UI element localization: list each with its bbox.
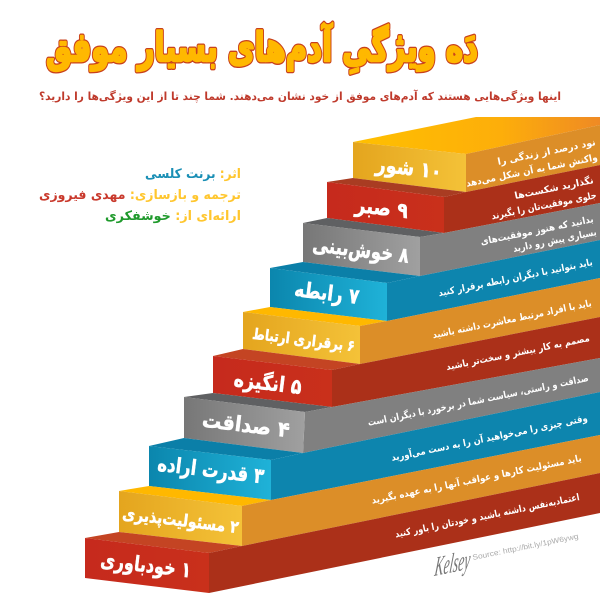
step 5: ۵ انگیزه: [233, 366, 303, 399]
step 10: ۱۰ شور: [374, 152, 443, 184]
credits: ترجمه و بازسازی: مهدی فیروزی: [39, 188, 241, 203]
credits: ارائه‌ای از: خوشفکری: [105, 209, 241, 224]
step 8: ۸ خوش‌بینی: [311, 232, 411, 268]
step 2: [119, 435, 600, 546]
step 3: ۳ قدرت اراده: [156, 452, 266, 488]
step 6: ۶ برقراری ارتباط: [251, 325, 356, 355]
step 2: باید مسئولیت کارها و عواقب آنها را به عهده بگیرید: [370, 451, 583, 507]
step 2: ۲ مسئولیت‌پذیری: [121, 504, 240, 538]
step 1: [85, 473, 600, 593]
subtitle: اینها ویژگی‌هایی هستند که آدم‌های موفق از خود نشان می‌دهند. شما چند تا از این ویژگی‌ها را دارید؟: [39, 89, 561, 103]
step 5: [213, 317, 600, 407]
credits: [39, 167, 241, 224]
step 7: [270, 240, 600, 321]
step 4: [184, 358, 600, 453]
credits: اثر: برنت کلسی: [145, 167, 241, 182]
source: Source: http://bit.ly/1pW6ywg: [472, 532, 579, 562]
step 9: نگذارید شکست‌ها: [513, 174, 595, 202]
step 8: [303, 203, 600, 276]
step 10: نود درصد از زندگی را: [496, 136, 597, 168]
step 7: ۷ رابطه: [293, 277, 361, 309]
step 9: [327, 165, 600, 233]
step 1: ۱ خودباوری: [99, 548, 192, 583]
step 6: [243, 278, 600, 364]
step 10: [353, 117, 600, 192]
step 9: ۹ صبر: [353, 193, 410, 223]
signature: Kelsey: [433, 543, 473, 582]
step 4: ۴ صداقت: [201, 408, 291, 442]
step 3: [149, 392, 600, 500]
